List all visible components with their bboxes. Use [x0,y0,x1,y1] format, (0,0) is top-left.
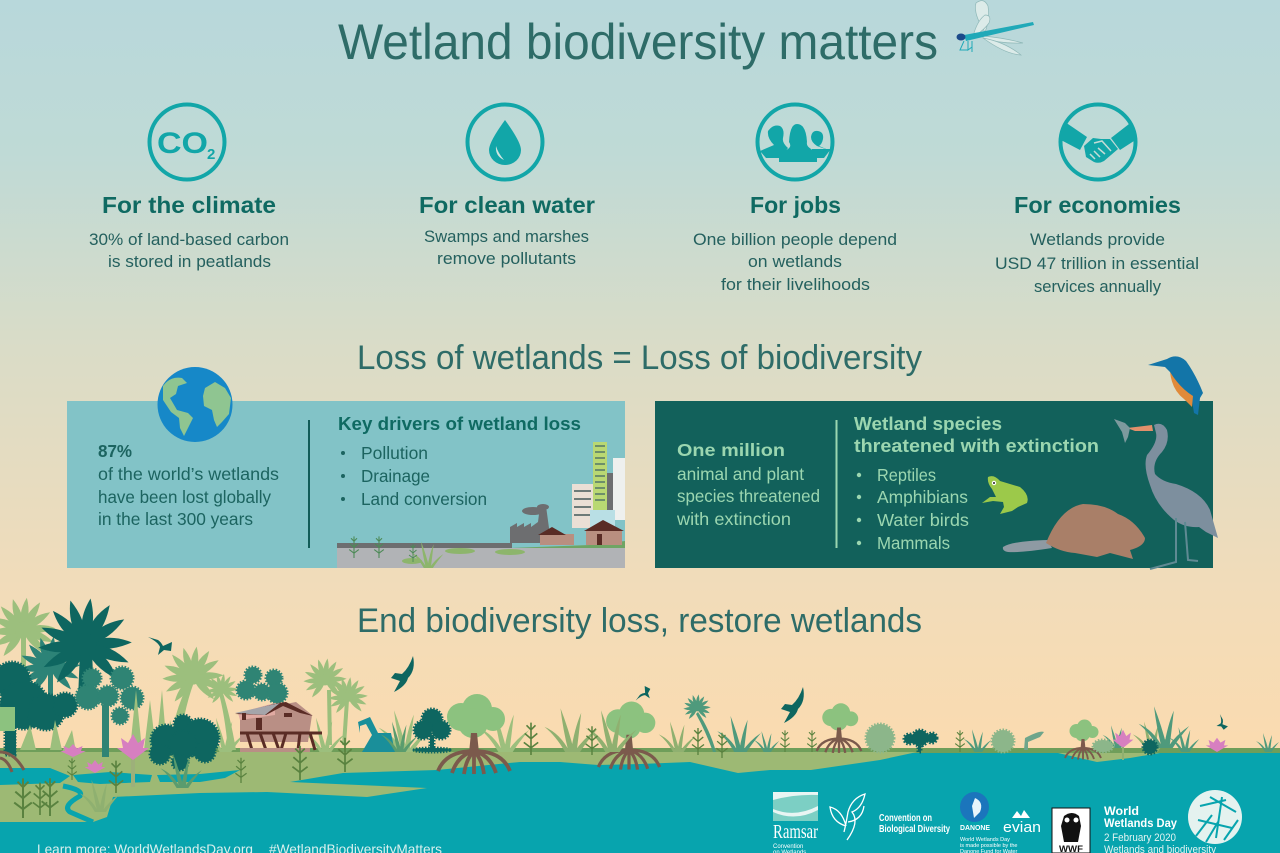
heading: loss of wetlands: Loss of wetlands = Loss of biodiversity [357,339,922,377]
pink water lilies [60,734,149,787]
text: economies: Wetlands provide [1030,230,1165,249]
green shrubs [866,724,1113,752]
light palms [303,658,529,752]
ground strip [0,748,1280,753]
heading: wetland species: threatened with extinction [854,435,1099,456]
text: one million: One million [677,440,785,460]
teal palm [19,636,81,727]
icon: beaver [1003,504,1145,559]
left edge mangrove [0,707,24,772]
text: jobs [693,230,897,294]
logo: World Wetlands Day: 2 February 2020 [1104,832,1176,844]
text: clean water [424,227,589,268]
text: climate: is stored in peatlands [108,252,271,271]
panel: species threatened [655,356,1218,569]
text: jobs: on wetlands [748,252,842,271]
logo: Ramsar: Ramsar [773,821,818,843]
logo: Danone and evian: World Wetlands Day [960,837,1010,843]
light reeds [20,646,245,752]
icon: heron [1114,419,1218,569]
heading: key drivers: Key drivers of wetland loss [338,413,581,434]
logo: Convention on Biological Diversity [830,794,950,840]
mangroves [438,694,1101,774]
lily-leaf tree [1024,732,1044,750]
text: clean water: Swamps and marshes [424,227,589,246]
land banks [0,752,1160,822]
list: species [857,465,969,553]
logo: Danone and evian: is made possible by the [960,843,1017,849]
text: one million: species threatened [677,486,820,506]
landscape [0,597,1280,853]
list: drivers: Land conversion [361,489,487,509]
logo: World Wetlands Day: World [1104,804,1139,818]
stilt house [235,702,322,752]
dark round tree [414,709,450,752]
text: 87 percent: 87% [98,441,132,461]
birds [148,637,1230,732]
crane [358,717,395,752]
heading: end biodiversity loss: End biodiversity loss, restore wetlands [357,602,922,640]
foreground plants, left [0,707,450,818]
heading: for clean water: For clean water [419,192,595,218]
text: 87 percent: of the world’s wetlands [98,464,279,484]
heading: for economies: For economies [1014,192,1181,218]
logo: Danone and evian [960,792,1041,853]
text: one million [676,440,820,529]
text: 87 percent: in the last 300 years [98,509,253,529]
list: species: Mammals [877,533,950,553]
icon: people [758,104,832,180]
logo: Convention on Biological Diversity: Convention on [879,813,932,824]
panel: wetland loss [67,367,625,568]
small palm [683,694,716,752]
text: climate [89,230,289,271]
text: one million: animal and plant [677,464,804,484]
text: economies: services annually [1034,277,1161,296]
logo: Convention on Biological Diversity: Biological Diversity [879,824,950,835]
logo: Ramsar: Convention [773,844,803,850]
text: one million: with extinction [676,509,791,529]
logo: WWF [1052,808,1090,853]
list: species: Amphibians [877,487,968,507]
heading: wetland species [854,413,1099,456]
list: drivers: Pollution [361,443,428,463]
dark shrubs [904,730,1157,754]
icon: CO2 circle: CO [157,127,208,160]
logo: World Wetlands Day: Wetlands Day [1104,816,1177,830]
icon: globe [158,367,232,442]
text: jobs: One billion people depend [693,230,897,249]
teal tree [76,667,143,757]
list: drivers: Drainage [361,466,430,486]
icon: kingfisher [1148,356,1203,415]
plants along the bank, right [524,694,1279,760]
illustration: city and drained land [337,442,625,568]
icon: CO2 circle: 2 [207,146,215,163]
title: Wetland biodiversity matters [338,14,938,70]
water [0,752,1280,853]
icon: CO2 circle [150,104,224,180]
column: jobs [693,104,897,294]
column: economies [995,104,1199,296]
footer links [37,841,442,853]
teal tree behind house [237,667,287,703]
column: climate [89,104,289,271]
back trees, left [0,597,529,757]
column: clean water [419,104,595,268]
icon: dragonfly [956,1,1034,55]
pink flowers [1113,730,1228,760]
text: 87 percent [98,441,279,529]
logo: Danone and evian: evian [1003,819,1041,836]
light palm far left [0,597,55,700]
text: 87 percent: have been lost globally [98,487,271,507]
text: economies: USD 47 trillion in essential [995,254,1199,273]
text: economies [995,230,1199,296]
logo: Danone and evian: DANONE [960,825,990,832]
logo: World Wetlands Day [1104,790,1242,853]
heading: wetland species: Wetland species [854,413,1002,434]
dark shrub [150,715,219,770]
list: drivers [341,443,487,509]
text: climate: 30% of land-based carbon [89,230,289,249]
icon: water drop [468,104,542,180]
text: clean water: remove pollutants [437,249,576,268]
icon: frog [982,476,1028,514]
dark canopy [0,662,77,755]
heading: for jobs: For jobs [750,192,841,218]
pools and river [0,768,240,822]
dark palm [38,598,132,700]
list: species: Reptiles [877,465,936,485]
logo: Ramsar [773,792,818,853]
text: jobs: for their livelihoods [721,275,870,294]
list: species: Water birds [877,510,969,530]
icon: handshake [1059,104,1137,180]
heading: for the climate: For the climate [102,192,276,218]
